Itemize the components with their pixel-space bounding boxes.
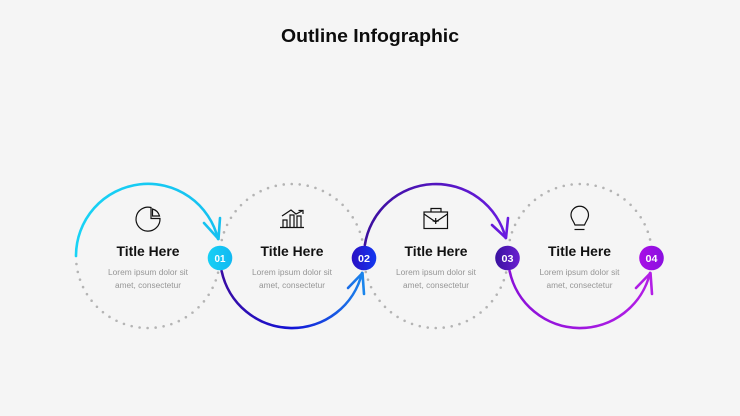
panel: step 1 (108, 207, 232, 290)
arrow 2: blue arc to badge 02 (222, 271, 364, 328)
icon: light bulb (571, 206, 588, 230)
step 3 heading: Title Here (404, 244, 468, 259)
arrow 3: violet arc to badge 03 (365, 184, 508, 245)
step 4 body text: amet, consectetur (546, 281, 613, 290)
panel: step 3 (396, 208, 520, 290)
icon: bar chart with arrow (280, 210, 304, 228)
icon: briefcase (424, 208, 448, 228)
step 2 body text: amet, consectetur (259, 281, 325, 290)
panel: step 4 (540, 206, 664, 290)
arrow 1: cyan arc to badge 01 (76, 184, 220, 256)
step 2 body text: Lorem ipsum dolor sit (252, 268, 333, 277)
badge 01: 01 (214, 253, 226, 265)
step 1 body text: Lorem ipsum dolor sit (108, 268, 189, 277)
dotted arc: circle 1 bottom (76, 264, 219, 328)
icon: pie chart (136, 207, 160, 231)
step 2 heading: Title Here (260, 244, 324, 259)
arrow 4: magenta arc to badge 04 (510, 271, 652, 328)
step 3 body text: amet, consectetur (403, 281, 469, 290)
step 1 heading: Title Here (116, 244, 180, 259)
title: Outline Infographic (281, 26, 459, 46)
panel: step 2 (252, 210, 376, 290)
step 4 body text: Lorem ipsum dolor sit (540, 268, 620, 277)
badge 02: 02 (358, 253, 370, 265)
badge 03: 03 (502, 253, 514, 265)
step 3 body text: Lorem ipsum dolor sit (396, 268, 477, 277)
dotted arc: circle 4 top (510, 184, 652, 248)
dotted arc: circle 3 bottom (366, 272, 506, 328)
step 1 body text: amet, consectetur (115, 281, 181, 290)
step 4 heading: Title Here (548, 244, 612, 259)
dotted arc: circle 2 top (222, 184, 362, 240)
badge 04: 04 (646, 253, 658, 265)
